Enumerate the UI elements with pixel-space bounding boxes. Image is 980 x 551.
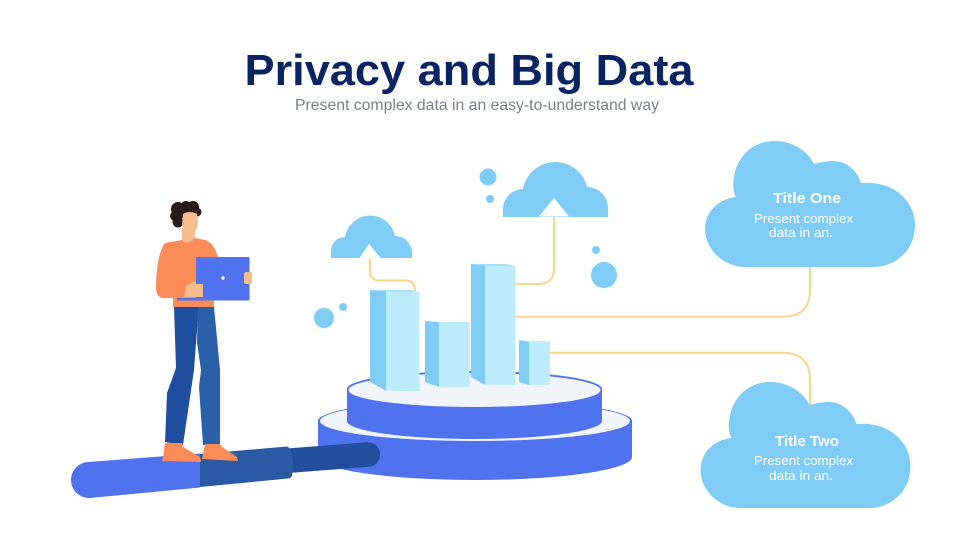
cloud callout: Title Two: Title Two: [775, 433, 839, 450]
cloud callout: Title Two: data in an.: [769, 469, 833, 483]
tablet: [177, 257, 250, 300]
cloud callout: Title One: data in an.: [769, 226, 833, 240]
hands: [184, 272, 252, 297]
bar 2: [425, 321, 470, 387]
upper platform: [347, 371, 602, 439]
bar chart: [370, 264, 550, 391]
cloud callout: Title One: Present complex: [754, 212, 854, 226]
cloud callout: Title One: [705, 141, 915, 267]
decorative bubbles: [314, 168, 617, 328]
bar 4: [519, 340, 550, 385]
title: Privacy and Big Data: [244, 46, 694, 95]
bar 1: [370, 290, 420, 391]
small cloud upload icon left: [331, 216, 412, 258]
person with tablet: [156, 201, 252, 462]
magnifier handle: [71, 446, 368, 498]
small cloud upload icon top: [503, 162, 608, 217]
hair: [170, 201, 202, 228]
sweater: [156, 238, 218, 307]
shoes: [162, 443, 238, 462]
bar 3: [471, 264, 516, 385]
lower platform: [318, 400, 632, 480]
legs: [165, 307, 220, 445]
cloud callout: Title One: Title One: [773, 190, 841, 207]
neck and face: [182, 212, 198, 246]
connector lines: [370, 217, 810, 405]
cloud callout: Title Two: [700, 382, 910, 508]
subtitle: Present complex data in an easy-to-understand way: [295, 97, 659, 114]
cloud callout: Title Two: Present complex: [754, 454, 854, 468]
